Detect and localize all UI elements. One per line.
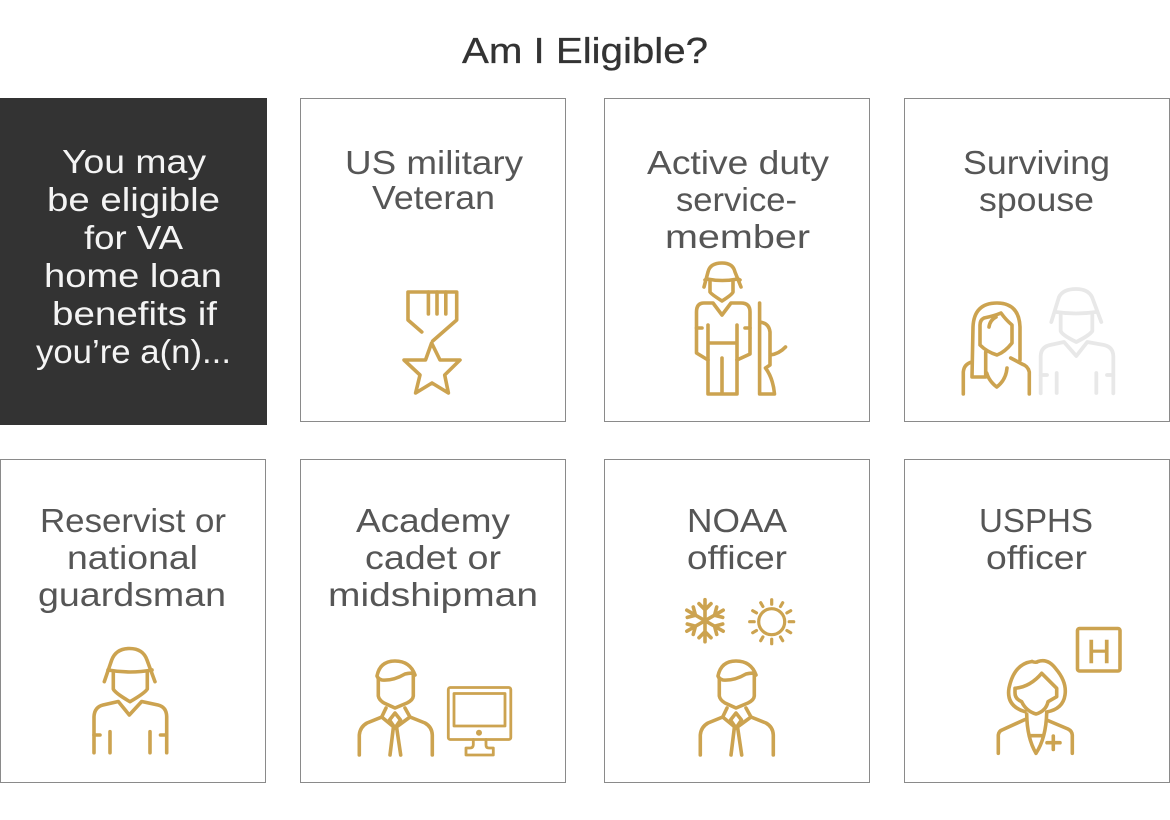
label: Active duty [647, 144, 830, 181]
icon: hospital sign [1078, 628, 1120, 671]
label: Surviving [963, 144, 1110, 181]
label: spouse [979, 181, 1094, 218]
label: guardsman [38, 576, 226, 613]
label [38, 502, 226, 613]
panel: NOAA officer [604, 460, 870, 782]
label: service- [676, 181, 797, 218]
label [647, 144, 830, 255]
label [328, 502, 538, 613]
icon: faded soldier [1041, 289, 1113, 393]
label [963, 144, 1110, 218]
icon: computer monitor [448, 688, 511, 755]
icon: medal with star [404, 292, 460, 393]
label: national [67, 539, 198, 576]
panel: Active duty service-member [604, 98, 870, 422]
panel: Academy cadet or midshipman [300, 460, 566, 782]
label [687, 502, 787, 576]
label: cadet or [365, 539, 501, 576]
label: midshipman [328, 576, 538, 613]
icon: soldier bust [94, 648, 167, 753]
panel: Reservist or national guardsman [0, 460, 266, 782]
label: Reservist or [40, 502, 226, 539]
icon: soldier with rifle [696, 263, 786, 394]
label: Veteran [372, 179, 495, 216]
intro text: for VA [84, 219, 183, 256]
panel: US military Veteran [300, 98, 566, 422]
icon: sun [750, 600, 794, 644]
label: Academy [356, 502, 511, 539]
label [979, 502, 1093, 576]
intro text: benefits if [52, 295, 218, 332]
icon: officer in suit [700, 661, 773, 755]
icon: man in suit [359, 661, 432, 755]
panel: intro [0, 98, 267, 425]
icon: snowflake [684, 600, 726, 642]
label: NOAA [687, 502, 787, 539]
intro text: You may [62, 143, 207, 180]
intro text [36, 143, 231, 370]
title: Am I Eligible? [462, 30, 708, 71]
label: US military [345, 144, 524, 181]
panel: USPHS officer [904, 460, 1170, 782]
intro text: home loan [44, 257, 222, 294]
icon: hospital sign: H [1087, 633, 1111, 670]
label [345, 144, 524, 216]
icon: woman [963, 303, 1029, 394]
label: officer [687, 539, 787, 576]
label: member [665, 218, 810, 255]
label: USPHS [979, 502, 1093, 539]
label: officer [986, 539, 1087, 576]
icon: female doctor [998, 661, 1072, 753]
intro text: you’re a(n)... [36, 333, 231, 370]
intro text: be eligible [47, 181, 220, 218]
panel: Surviving spouse [904, 98, 1170, 422]
